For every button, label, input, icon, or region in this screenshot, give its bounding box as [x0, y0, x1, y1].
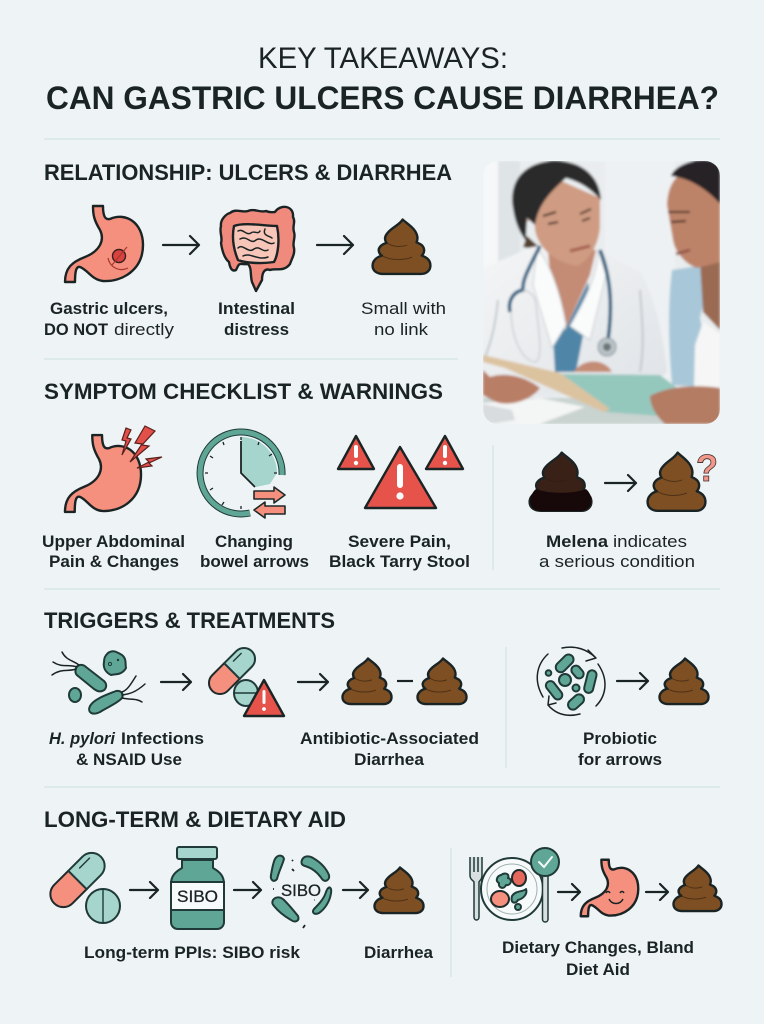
icon: stool with question mark: ? [696, 448, 718, 490]
label: gastric ulcers [44, 299, 175, 339]
arrow [163, 236, 199, 254]
label: severe pain: Black Tarry Stool [329, 552, 470, 571]
icon: SIBO bottle [171, 847, 224, 929]
panel: symptom checklist and warnings [42, 379, 718, 571]
label: dietary changes: Dietary Changes, Bland [502, 938, 694, 957]
label: changing bowel arrows: bowel arrows [200, 552, 309, 571]
heading: triggers: TRIGGERS & TREATMENTS [44, 608, 335, 633]
arrow [646, 884, 668, 900]
icon: probiotic cycle [537, 647, 605, 715]
label: melena: indicates [613, 532, 687, 551]
label: gastric ulcers: Gastric ulcers, [50, 299, 168, 318]
label: upper abdominal pain: Pain & Changes [49, 552, 179, 571]
icon: stool [374, 867, 424, 913]
panel: triggers and treatments [44, 608, 709, 769]
panel: long-term and dietary aid [44, 807, 722, 979]
arrow [605, 475, 636, 491]
panel: relationship between ulcers and diarrhea [44, 160, 452, 339]
label: small with no link [361, 299, 446, 339]
label: H. pylori infections: H. pylori [49, 729, 116, 748]
label: diarrhea: Diarrhea [364, 943, 434, 962]
heading: long-term: LONG-TERM & DIETARY AID [44, 807, 346, 832]
heading: symptoms: SYMPTOM CHECKLIST & WARNINGS [44, 379, 443, 404]
title [46, 42, 719, 116]
label: antibiotic-associated diarrhea: Antibiotic-Associated [300, 729, 479, 748]
icon: bacteria [52, 651, 145, 714]
icon: black tarry stool [530, 453, 591, 511]
icon: stool with question mark [648, 448, 718, 511]
heading: relationship: RELATIONSHIP: ULCERS & DIARRHEA [44, 160, 452, 185]
title: CAN GASTRIC ULCERS CAUSE DIARRHEA? [46, 80, 719, 116]
label: H. pylori infections [49, 729, 204, 769]
arrow [617, 673, 648, 689]
icon: capsule and tablet [45, 847, 120, 923]
photo: doctor and patient reviewing clipboard [483, 160, 720, 424]
icon: SIBO bacteria ring [271, 856, 331, 928]
icon: plate with fork and check [470, 848, 559, 922]
label: changing bowel arrows [200, 532, 309, 571]
arrow [234, 882, 261, 898]
label: antibiotic-associated diarrhea: Diarrhea [354, 750, 425, 769]
icon: stool [659, 658, 709, 704]
icon: SIBO bacteria ring: SIBO [281, 881, 321, 900]
label: melena [539, 532, 695, 571]
icon: pill and NSAID warning [204, 643, 284, 716]
label: changing bowel arrows: Changing [215, 532, 293, 551]
label: probiotic [578, 729, 662, 769]
label: antibiotic-associated diarrhea [300, 729, 479, 769]
icon: stool [373, 220, 430, 274]
icon: stool [673, 865, 722, 911]
label: intestinal distress: Intestinal [218, 299, 295, 318]
label: long-term PPIs: Long-term PPIs: SIBO risk [84, 943, 301, 962]
arrow [558, 884, 580, 900]
label: probiotic: Probiotic [583, 729, 657, 748]
label: upper abdominal pain [42, 532, 185, 571]
label: small with no link: no link [374, 320, 429, 339]
label: dietary changes [502, 938, 694, 979]
label: upper abdominal pain: Upper Abdominal [42, 532, 185, 551]
icon: intestines [220, 207, 295, 291]
label: dietary changes: Diet Aid [566, 960, 630, 979]
label: gastric ulcers: DO NOT [44, 320, 109, 339]
icon: stomach with ulcer [65, 206, 143, 282]
label: melena: Melena [546, 532, 609, 551]
label: intestinal distress: distress [224, 320, 289, 339]
icon: stomach with pain bolts [65, 426, 162, 512]
label: small with no link: Small with [361, 299, 446, 318]
label: gastric ulcers: directly [114, 320, 175, 339]
icon: warning triangles [338, 436, 463, 508]
title: KEY TAKEAWAYS: [258, 42, 508, 75]
label: H. pylori infections: Infections [121, 729, 204, 748]
arrow [161, 674, 191, 690]
arrow [343, 882, 368, 898]
label: intestinal distress [218, 299, 295, 339]
label: probiotic: for arrows [578, 750, 662, 769]
icon: SIBO bottle: SIBO [177, 887, 218, 906]
arrow [130, 882, 158, 898]
label: H. pylori infections: & NSAID Use [76, 750, 182, 769]
label: melena: a serious condition [539, 552, 695, 571]
arrow [317, 236, 353, 254]
label: severe pain: Severe Pain, [348, 532, 451, 551]
icon: happy stomach [581, 860, 638, 916]
icon: clock with arrows [200, 432, 285, 518]
arrow [298, 674, 328, 690]
label: severe pain [329, 532, 470, 571]
icon: two stools [342, 658, 467, 704]
